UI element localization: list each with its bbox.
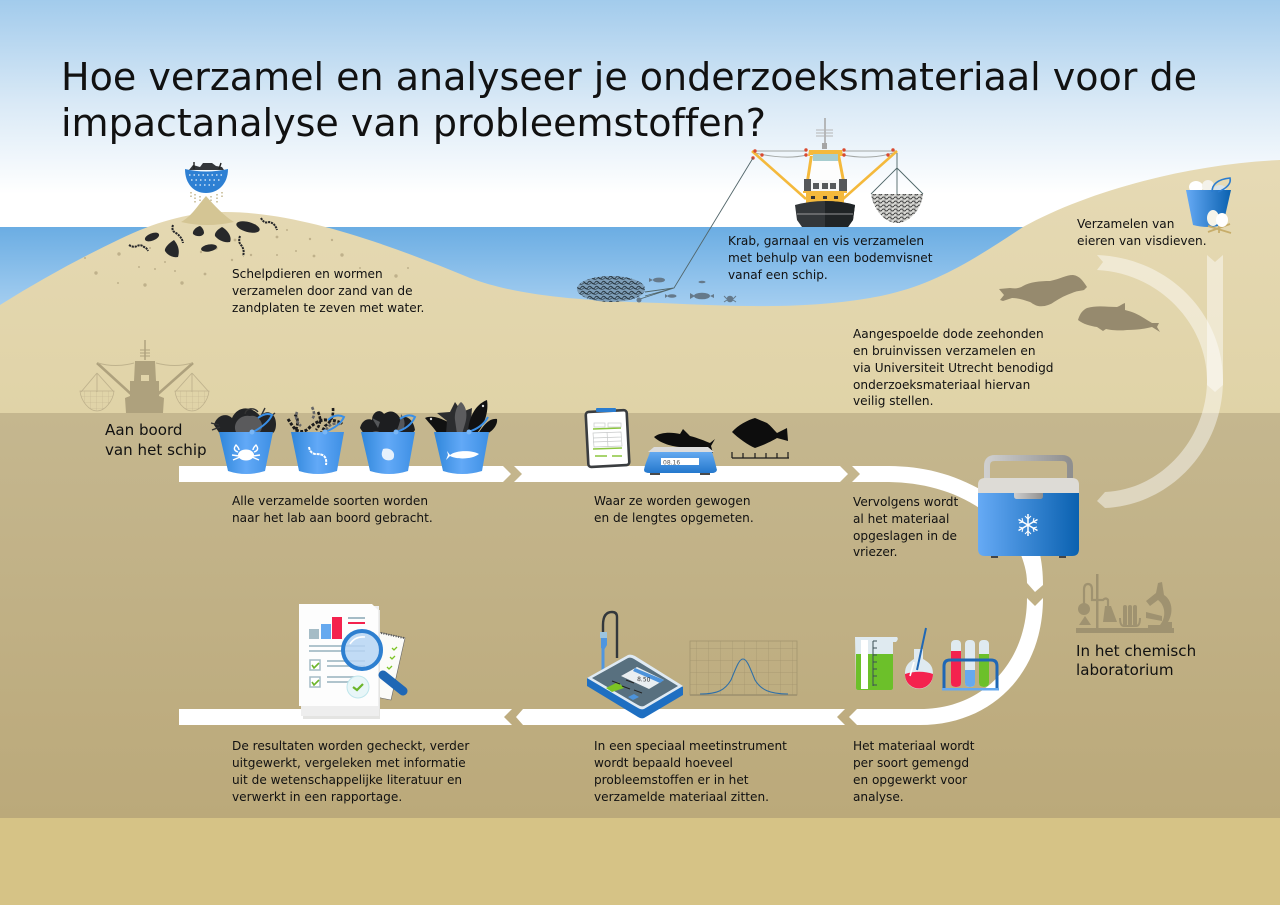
- translucent arrow: seals to cooler: [1097, 255, 1223, 508]
- icon: test tubes in rack: [942, 640, 999, 690]
- lower sand band: [0, 413, 1280, 819]
- bucket: shrimps/worms: [288, 407, 344, 474]
- text: report: verwerkt in een rapportage.: [232, 790, 402, 804]
- bottom sand strip: [0, 818, 1280, 905]
- sky: [0, 0, 1280, 228]
- text: mix: en opgewerkt voor: [853, 773, 967, 787]
- bucket: crabs: [211, 408, 276, 474]
- icon: bucket with tern eggs: [1186, 178, 1231, 233]
- heading: chemical lab: laboratorium: [1076, 661, 1174, 679]
- arrow: row 3 segment 1: [179, 709, 512, 725]
- bucket: mussels: [360, 411, 415, 474]
- text: trawl: Krab, garnaal en vis verzamelen: [728, 234, 924, 248]
- trawl line and bottom net: [577, 158, 753, 302]
- arrow: row 1 segment 2: [514, 466, 848, 482]
- icon: lab silhouette: [1076, 574, 1174, 633]
- sand bank landscape: [0, 160, 1280, 414]
- text: weigh: Waar ze worden gewogen: [594, 494, 751, 508]
- text: seals: veilig stellen.: [853, 394, 933, 408]
- icon: fishing ship with nets: [577, 118, 923, 302]
- title: [61, 55, 1197, 145]
- text: measure: probleemstoffen er in het: [594, 773, 749, 787]
- text: to the lab: Alle verzamelde soorten worden: [232, 494, 428, 508]
- icon: ship silhouette: [80, 340, 209, 413]
- bucket: fish: [425, 400, 497, 474]
- arrow: curve to row 3: [849, 598, 1043, 725]
- text: measure: verzamelde materiaal zitten.: [594, 790, 769, 804]
- text: shellfish: verzamelen door zand van de: [232, 284, 413, 298]
- icon: cooler box: [978, 458, 1079, 558]
- text: trawl: met behulp van een bodemvisnet: [728, 251, 933, 265]
- heading: on board: Aan boord: [105, 421, 183, 439]
- text: freezer: vriezer.: [853, 545, 897, 559]
- text: mix: Het materiaal wordt: [853, 739, 975, 753]
- arrow: row 1 segment 1: [179, 466, 511, 482]
- icon: measuring instrument: [587, 612, 683, 718]
- text: report: uitgewerkt, vergeleken met informatie: [232, 756, 466, 770]
- text: seals: en bruinvissen verzamelen en: [853, 344, 1036, 358]
- text: mix: analyse.: [853, 790, 904, 804]
- text: freezer: al het materiaal: [853, 512, 949, 526]
- text: freezer: Vervolgens wordt: [853, 495, 958, 509]
- text: seals: Aangespoelde dode zeehonden: [853, 327, 1044, 341]
- hanging net: [871, 153, 923, 223]
- icon: flatfish with ruler: [732, 418, 789, 458]
- translucent arrow: from tern eggs: [1207, 255, 1223, 392]
- chart: bell curve: [690, 641, 797, 695]
- text: report: De resultaten worden gecheckt, verder: [232, 739, 469, 753]
- sea: [0, 227, 1280, 312]
- text: seals: onderzoeksmateriaal hiervan: [853, 378, 1030, 392]
- sand specks on hill: [84, 224, 409, 287]
- icon: fish on scale: 08.16: [663, 460, 680, 466]
- icon: flask with stirrer: [905, 628, 933, 689]
- text: mix: per soort gemengd: [853, 756, 969, 770]
- text: measure: wordt bepaald hoeveel: [594, 756, 733, 770]
- icon: clipboard: [586, 408, 629, 467]
- icon: snowflake: [1018, 514, 1038, 536]
- text: seals: via Universiteit Utrecht benodigd: [853, 361, 1053, 375]
- icon: seal silhouette: [999, 275, 1087, 306]
- icon: porpoise silhouette: [1078, 303, 1160, 332]
- text: to the lab: naar het lab aan boord gebracht.: [232, 511, 433, 525]
- arrow: row 1 curve into cooler: [852, 466, 1000, 515]
- icon: fish on scale: [644, 429, 717, 475]
- title: impactanalyse van probleemstoffen?: [61, 101, 766, 145]
- text: tern eggs: Verzamelen van: [1077, 217, 1174, 231]
- icon: measuring instrument: 8.50: [637, 676, 651, 684]
- text: shellfish: zandplaten te zeven met water.: [232, 301, 424, 315]
- text: weigh: en de lengtes opgemeten.: [594, 511, 754, 525]
- icon: report with magnifier: [299, 604, 405, 719]
- text: tern eggs: eieren van visdieven.: [1077, 234, 1207, 248]
- text: trawl: vanaf een schip.: [728, 268, 828, 282]
- heading: chemical lab: In het chemisch: [1076, 642, 1196, 660]
- small fish and crabs near net: [636, 278, 736, 302]
- arrow: from cooler down: [1019, 550, 1043, 592]
- text: measure: In een speciaal meetinstrument: [594, 739, 787, 753]
- text: freezer: opgeslagen in de: [853, 529, 957, 543]
- heading: on board: van het schip: [105, 441, 207, 459]
- text: shellfish: Schelpdieren en wormen: [232, 267, 383, 281]
- text: report: uit de wetenschappelijke literatuur en: [232, 773, 462, 787]
- icon: beaker: [855, 637, 898, 690]
- icon: colander with shells sieving sand: [181, 162, 234, 225]
- icon: shells and worms on the sand: [129, 218, 277, 257]
- arrow: row 3 segment 2: [516, 709, 845, 725]
- title: Hoe verzamel en analyseer je onderzoeksmateriaal voor de: [61, 55, 1197, 99]
